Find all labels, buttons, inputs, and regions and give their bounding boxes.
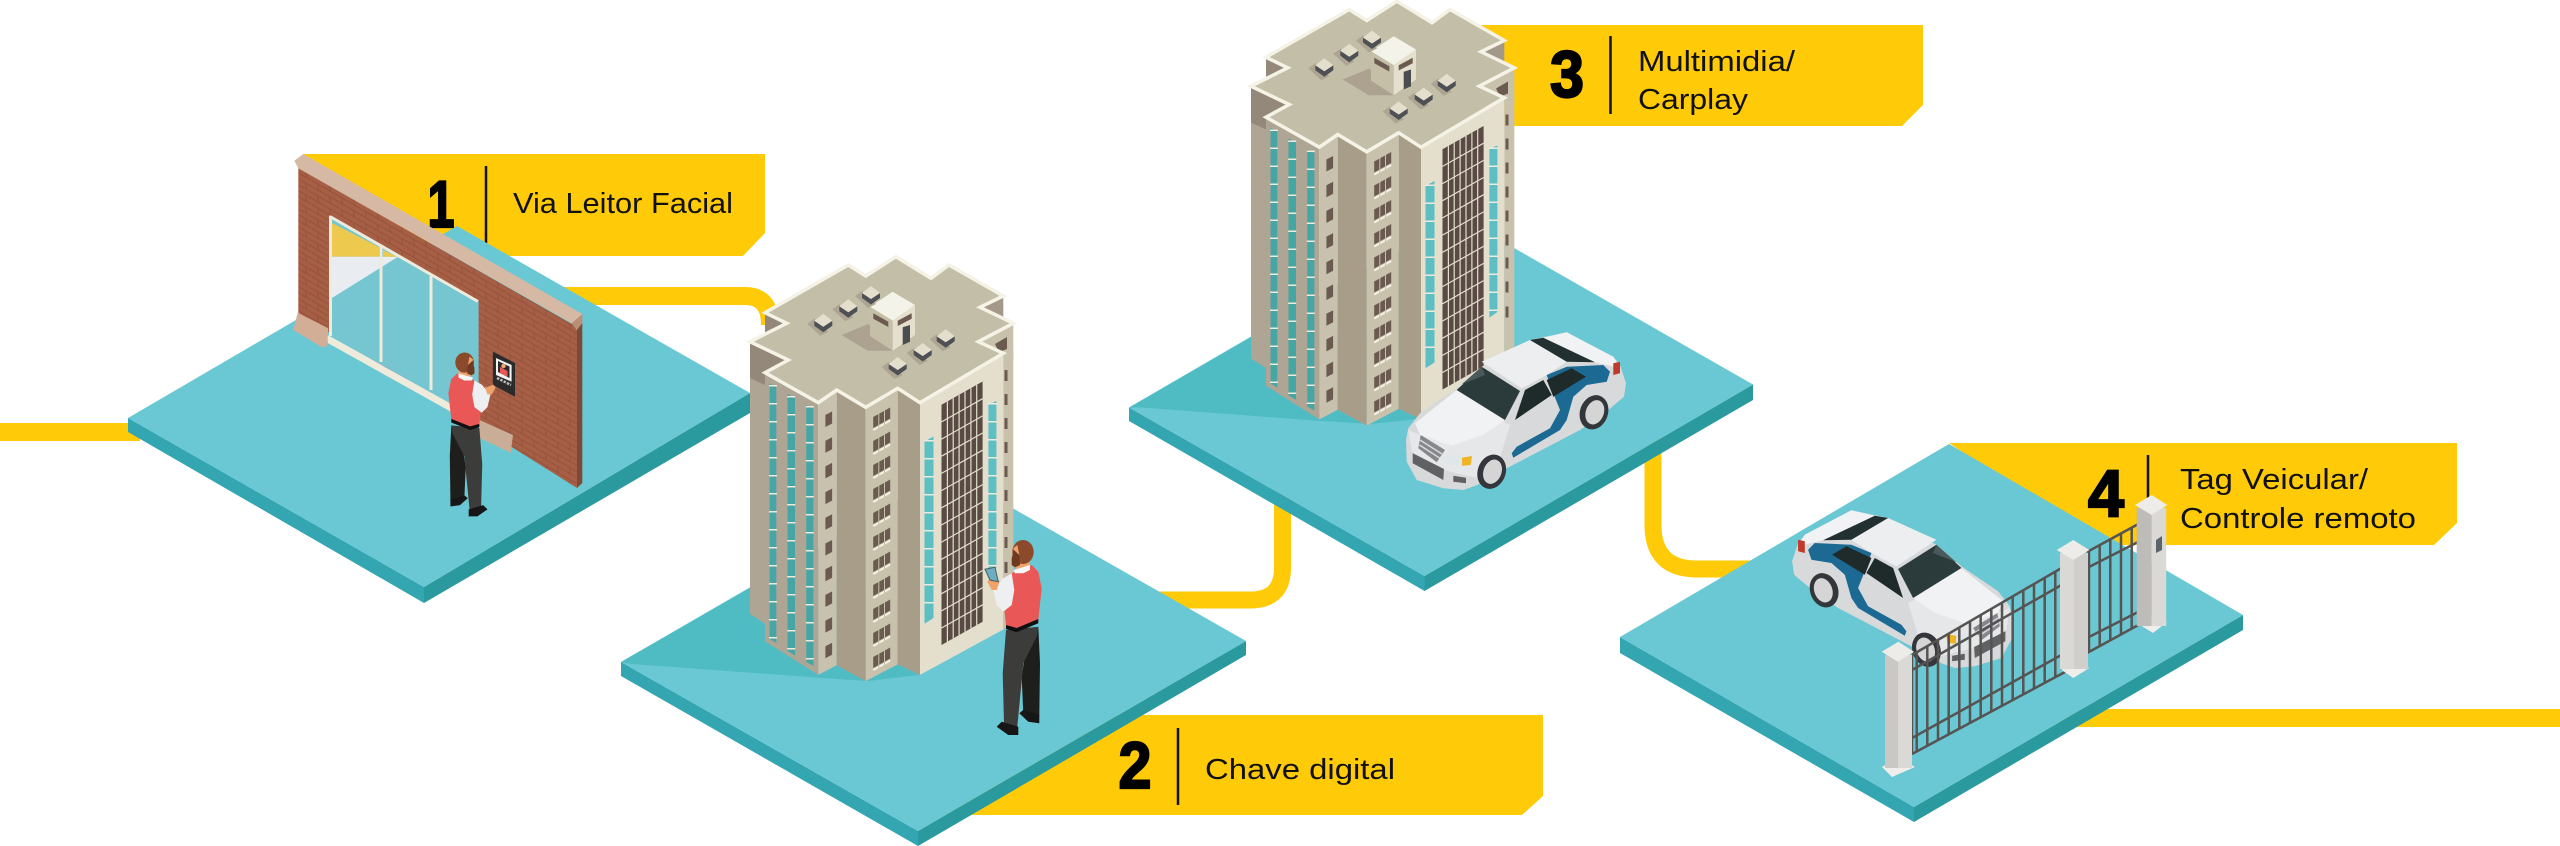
connector line: entry from left edge [0, 423, 140, 441]
banner 1 divider [485, 166, 487, 243]
gate left panel [1912, 566, 2065, 754]
man: shoes [997, 710, 1039, 735]
tower roof [750, 257, 1013, 407]
tower main bright face [920, 353, 1003, 675]
residential tower 2 [1251, 1, 1514, 426]
rooftop penthouse [870, 292, 915, 351]
gate post left [1882, 642, 1915, 777]
wall end face [577, 323, 582, 488]
banner 4 [1949, 443, 2457, 545]
step number 1: 1 [428, 167, 454, 241]
car windshield [1457, 367, 1520, 420]
man: beard [1012, 550, 1020, 567]
man: back leg [1022, 627, 1040, 717]
man: face [1013, 545, 1019, 555]
tower small windows [825, 412, 832, 658]
car side windows [1515, 380, 1552, 420]
connector line: step 2 to step 3 [1150, 480, 1282, 600]
banner 3 label: Multimidia/ [1638, 46, 1796, 78]
wall plinth left [293, 313, 328, 347]
car front fascia [1408, 420, 1510, 478]
step number 2: 2 [1118, 728, 1152, 802]
car blue swoosh [1512, 365, 1610, 458]
wall coping [294, 154, 582, 330]
car tail light [1613, 362, 1620, 375]
banner 4 label: Tag Veicular/ [2180, 464, 2369, 496]
car headlight [1462, 456, 1472, 466]
access panel with face reader [493, 352, 515, 397]
tower ladder windows [873, 408, 890, 668]
car lower bumper [1413, 453, 1444, 480]
connector line: exit to right edge [2060, 709, 2560, 727]
car at gate [1792, 510, 2012, 671]
window frame [330, 216, 478, 390]
banner 3 [1478, 25, 1923, 126]
man: hair [1012, 540, 1034, 564]
banner 4 divider [2147, 455, 2149, 500]
man: collar [1013, 565, 1030, 573]
car body [1406, 332, 1626, 490]
platform 1 [128, 226, 750, 603]
platform 4 [1620, 444, 2243, 822]
platform 3 [1129, 216, 1753, 591]
rooftop vents [807, 286, 955, 379]
gate right panel [2087, 522, 2142, 653]
car fog lamp [1453, 476, 1466, 483]
banner 4: Controle remoto [2180, 503, 2416, 535]
step number 4: 4 [2088, 456, 2124, 530]
car rear window [1530, 338, 1595, 362]
tower back pieces [765, 313, 787, 337]
man: vest [1004, 565, 1042, 629]
car grille [1418, 435, 1445, 462]
tower right glass strips [924, 401, 996, 624]
wall brick face [298, 168, 577, 488]
step number 3: 3 [1550, 37, 1584, 111]
car wheels [1473, 391, 1613, 493]
banner 3: Carplay [1638, 84, 1749, 116]
platform 2 [621, 472, 1246, 846]
man with phone [985, 540, 1042, 735]
tower left wing face [750, 342, 765, 624]
smartphone [985, 567, 998, 582]
banner 3 divider [1609, 36, 1612, 114]
connector line: step 1 to step 2 [540, 296, 770, 325]
man: belt [1006, 619, 1038, 632]
car trunk [1543, 332, 1620, 368]
banner 2 divider [1177, 728, 1179, 805]
window sill [328, 335, 480, 428]
window glass [329, 215, 479, 420]
banner 2 [940, 715, 1543, 815]
tower right side face [1003, 350, 1013, 630]
residential tower 1 [750, 257, 1013, 681]
tower corner faces [818, 390, 837, 675]
car at tower 2 [1406, 332, 1626, 493]
man: hand [987, 578, 1000, 590]
roof shadow [842, 324, 893, 351]
connector line: step 3 to step 4 [1653, 430, 1780, 569]
gate [1882, 495, 2167, 777]
brick wall with sliding window [293, 154, 582, 488]
tower left glass strips [770, 383, 813, 666]
car head lens [1442, 453, 1462, 465]
banner 1 [303, 154, 765, 256]
gate post right with tag reader [2135, 495, 2167, 633]
wall plinth right [480, 420, 513, 453]
man at face reader [448, 352, 496, 516]
man: neck [1015, 560, 1030, 572]
gate post middle [2057, 540, 2089, 678]
banner 2 label: Chave digital [1205, 754, 1395, 786]
car hood [1415, 390, 1505, 446]
banner 1 label: Via Leitor Facial [513, 188, 733, 220]
tower dark glazed curtain wall [942, 382, 983, 645]
man: front leg [1003, 627, 1038, 727]
man: sleeve [993, 573, 1014, 612]
car roof [1482, 340, 1567, 388]
